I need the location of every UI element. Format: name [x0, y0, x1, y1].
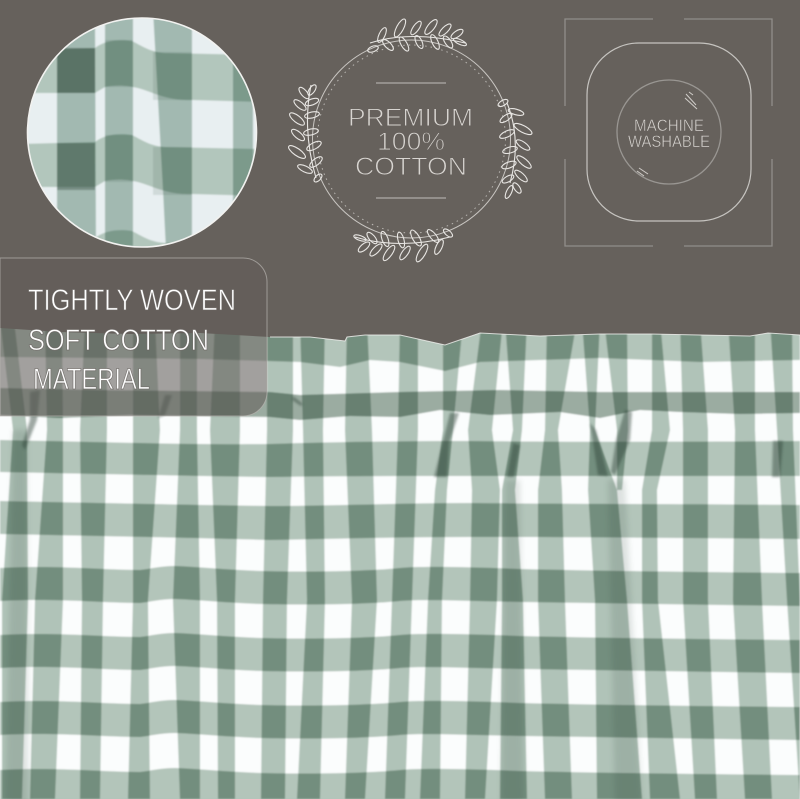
label: machine washable: MACHINE — [634, 116, 704, 135]
label: machine washable: WASHABLE — [628, 132, 710, 151]
fabric swatch circle — [26, 17, 258, 248]
leaf branch: bottom — [353, 227, 454, 263]
curtain top edge cover — [0, 300, 800, 345]
wreath ring — [312, 40, 510, 238]
woven check pattern — [0, 320, 800, 799]
leaf branch: top — [367, 18, 467, 54]
machine washable icon — [565, 19, 772, 246]
badge text: premium 100% cotton — [348, 104, 473, 181]
text panel: tightly woven soft cotton material — [0, 258, 267, 416]
premium cotton wreath badge — [287, 18, 533, 263]
badge text: premium 100% cotton: 100% — [377, 128, 445, 156]
translucent rounded panel — [0, 258, 267, 416]
pleat shadows — [22, 390, 783, 477]
badge text: premium 100% cotton: PREMIUM — [348, 104, 473, 132]
panel text: SOFT COTTON — [28, 324, 209, 357]
badge text: premium 100% cotton: COTTON — [355, 153, 467, 181]
rounded square outline — [587, 43, 751, 221]
inner circle — [617, 80, 721, 184]
corner brackets — [565, 19, 772, 246]
panel text: TIGHTLY WOVEN — [28, 284, 236, 317]
panel text: MATERIAL — [33, 363, 150, 396]
gingham curtain — [0, 300, 800, 799]
divider lines — [376, 83, 446, 198]
label: machine washable — [628, 116, 710, 151]
leaf branch: left — [287, 83, 324, 183]
panel text — [28, 284, 236, 396]
glint marks — [637, 92, 697, 176]
soft fold shading — [5, 430, 642, 799]
leaf branch: right — [497, 98, 533, 199]
